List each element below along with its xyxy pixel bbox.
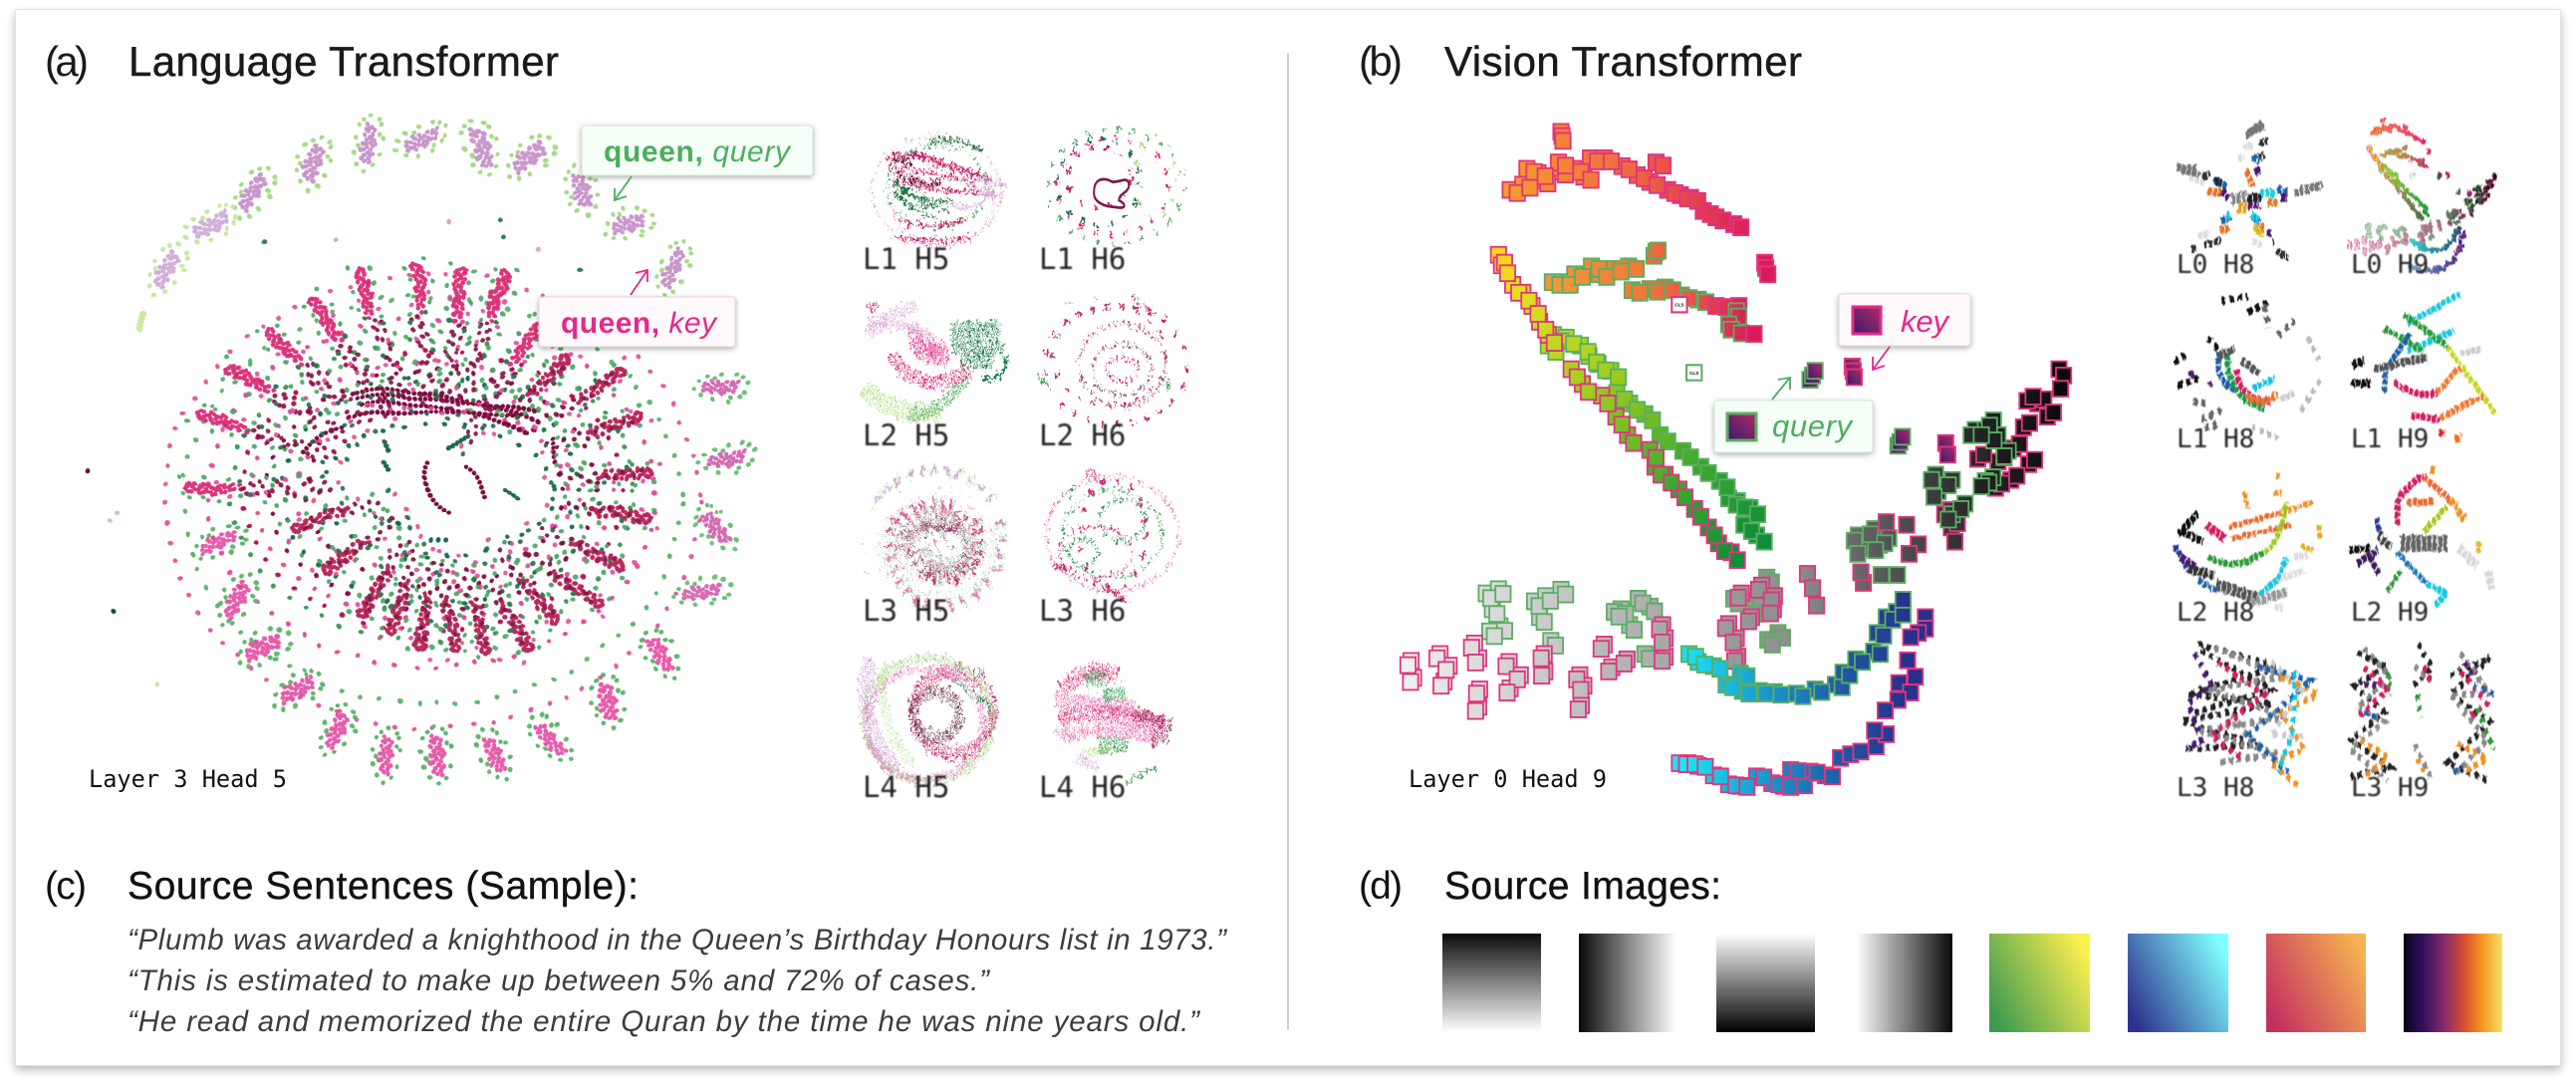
labels: vision thumbnails: L1 H8 [2177, 424, 2254, 454]
CLS tokens: CLS [1674, 303, 1683, 308]
gradient swatches [1442, 934, 2502, 1032]
L3 H6 [1046, 472, 1178, 603]
label: Layer 3 Head 5: Layer 3 Head 5 [89, 765, 287, 793]
labels: vision thumbnails: L0 H9 [2351, 250, 2429, 280]
labels: language thumbnails: L2 H6 [1039, 418, 1126, 452]
callout: key [1839, 294, 1970, 346]
L4 H6 [1056, 672, 1172, 783]
L1 H6 [1048, 130, 1183, 244]
small multiples: vision heads [2175, 118, 2497, 803]
labels: language thumbnails [863, 242, 1126, 804]
labels: vision thumbnails: L2 H8 [2177, 598, 2254, 628]
small multiples: language heads [861, 130, 1187, 804]
thumbnail plots [2175, 118, 2497, 786]
divider [1287, 53, 1289, 1030]
L2 H6 [1039, 296, 1187, 424]
heading: (a) Language Transformer: Language Transformer [129, 38, 559, 85]
heading: (b) Vision Transformer: Vision Transformer [1444, 38, 1802, 85]
L2 H8 [2175, 472, 2319, 608]
CLS tokens [1672, 297, 1701, 381]
curve: L1 H6 loop [1094, 179, 1129, 207]
heading: (d) Source Images:: Source Images: [1444, 865, 1721, 908]
heading: (b) Vision Transformer: (b) [1359, 38, 1403, 85]
labels: vision thumbnails: L0 H8 [2177, 250, 2254, 280]
scatter plot: Layer 3 Head 5 [89, 113, 757, 785]
labels: vision thumbnails [2177, 250, 2429, 803]
arrow: to queen query [615, 176, 632, 200]
L1 H8 [2175, 296, 2321, 438]
arrow: to query [1772, 378, 1790, 400]
arrow: to key [1873, 347, 1890, 370]
panel: language transformer [45, 38, 1187, 804]
L3 H9 [2351, 644, 2493, 781]
L3 H8 [2182, 644, 2318, 786]
callout: queen, key [539, 297, 735, 347]
labels: vision thumbnails: L1 H9 [2351, 424, 2429, 454]
heading: (c) Source Sentences (Sample):: Source Sentences (Sample): [128, 865, 639, 908]
labels: vision thumbnails: L3 H8 [2177, 773, 2254, 803]
labels: language thumbnails: L1 H5 [863, 242, 949, 276]
L3 H5 [861, 463, 1009, 612]
arrow: to queen key [631, 270, 647, 295]
thumbnail plots [861, 130, 1187, 783]
labels: vision thumbnails: L2 H9 [2351, 598, 2429, 628]
text block: sample sentences: “This is estimated to make up between 5% and 72% of cases.” [128, 964, 990, 997]
callout: queen, query: queen, query [604, 136, 792, 168]
L0 H9 [2348, 118, 2497, 273]
callout: query: query [1772, 408, 1855, 443]
labels: language thumbnails: L3 H6 [1039, 594, 1126, 628]
L1 H9 [2351, 294, 2495, 438]
labels: language thumbnails: L3 H5 [863, 594, 949, 628]
L2 H5 [865, 306, 1006, 415]
callout: queen, query [582, 126, 813, 175]
panel: vision transformer [1359, 38, 2497, 803]
L1 H5 [872, 136, 1006, 246]
heading: (d) Source Images:: (d) [1359, 865, 1403, 908]
label: Layer 0 Head 9: Layer 0 Head 9 [1409, 765, 1607, 793]
callout: query [1714, 401, 1873, 452]
text block: sample sentences: “Plumb was awarded a knighthood in the Queen’s Birthday Honours list in 1973.” [128, 924, 1227, 956]
heading: (a) Language Transformer: (a) [45, 38, 89, 85]
callout: key: key [1901, 304, 1950, 339]
labels: language thumbnails: L4 H5 [863, 770, 949, 804]
panel: source sentences [45, 865, 1227, 1038]
labels: language thumbnails: L2 H5 [863, 418, 949, 452]
L0 H8 [2177, 123, 2323, 257]
text block: sample sentences: “He read and memorized the entire Quran by the time he was nine years old.” [128, 1005, 1200, 1038]
labels: language thumbnails: L4 H6 [1039, 770, 1126, 804]
heading: (c) Source Sentences (Sample):: (c) [45, 865, 87, 908]
labels: language thumbnails: L1 H6 [1039, 242, 1126, 276]
L4 H5 [864, 658, 993, 781]
panel: source images [1359, 865, 2502, 1032]
text block: sample sentences [128, 924, 1227, 1038]
scatter plot: Layer 0 Head 9 [1401, 124, 2071, 795]
callout: queen, key: queen, key [561, 307, 718, 340]
labels: vision thumbnails: L3 H9 [2351, 773, 2429, 803]
L2 H9 [2349, 470, 2492, 605]
CLS tokens: CLS [1689, 371, 1698, 376]
